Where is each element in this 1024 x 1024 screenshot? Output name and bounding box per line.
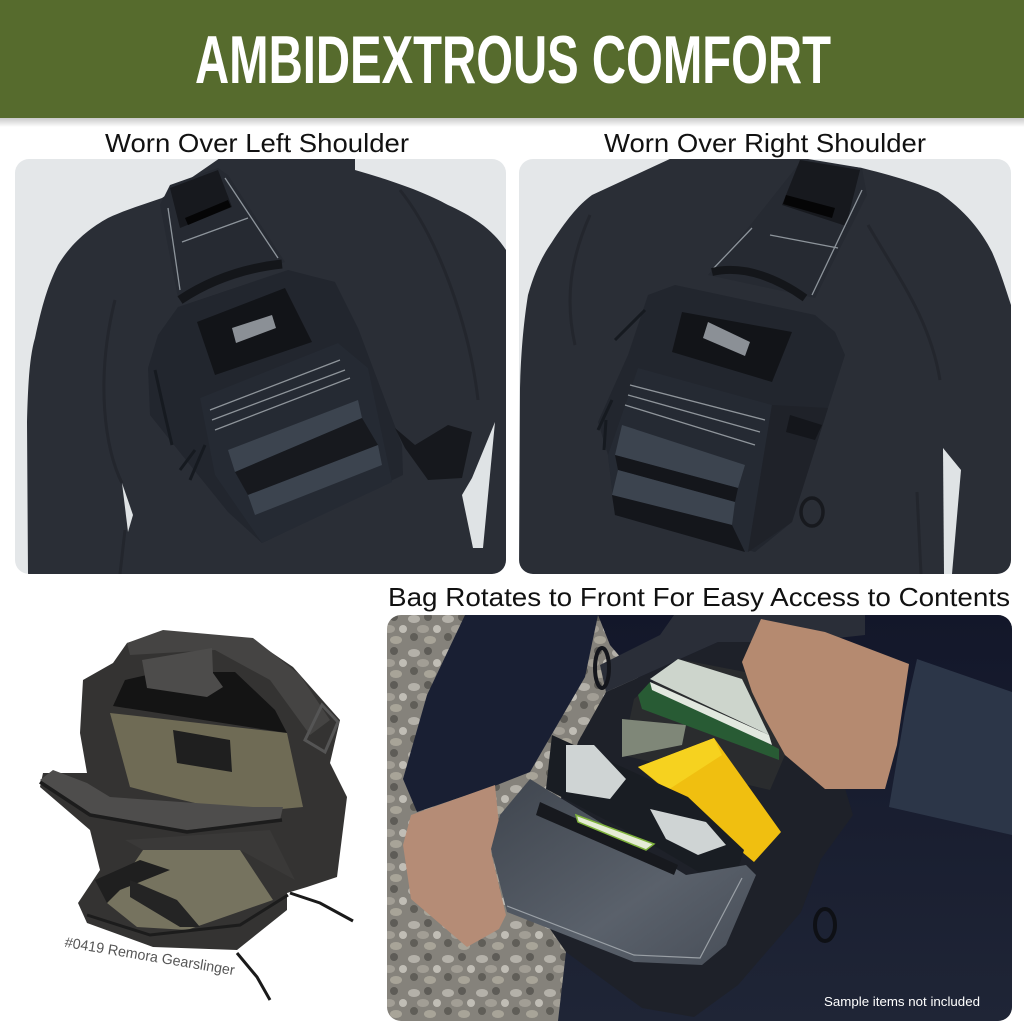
velcro tab	[142, 648, 223, 697]
header banner	[0, 0, 1024, 127]
interior tan lining	[110, 713, 303, 813]
left cords	[598, 310, 645, 450]
camouflage pouch	[546, 735, 744, 853]
right sleeve	[889, 659, 1012, 835]
inner label patch	[173, 730, 232, 772]
d-ring	[595, 648, 609, 688]
product photo: open bag	[40, 630, 353, 1000]
seams and arm shading	[104, 190, 478, 574]
interior pocket	[622, 659, 785, 790]
d-ring	[305, 705, 338, 752]
yellow block	[638, 738, 781, 862]
strap with buckle	[164, 176, 193, 197]
flap with zipper	[40, 770, 283, 830]
webbing	[228, 400, 362, 472]
heading: right shoulder: Worn Over Right Shoulder	[604, 128, 926, 158]
left arm	[403, 615, 598, 812]
caption: product name: #0419 Remora Gearslinger	[64, 935, 236, 979]
handle	[712, 270, 805, 298]
lower pocket rim zipper	[87, 895, 288, 935]
torso	[558, 615, 1012, 1021]
left hand	[403, 785, 506, 947]
side strap	[748, 550, 750, 552]
strap and handle	[127, 630, 330, 735]
handle	[180, 264, 282, 300]
side clip and strap	[395, 425, 472, 480]
panel: worn over left shoulder photo	[15, 158, 506, 574]
heading: bag rotates: Bag Rotates to Front For Easy Access to Contents	[388, 582, 1010, 612]
velcro strip	[536, 802, 678, 875]
webbing	[615, 425, 745, 488]
lower tan lining	[107, 850, 273, 930]
seams	[570, 215, 940, 574]
top strap	[600, 615, 865, 692]
bag lower body	[530, 642, 853, 1017]
panel: bag rotated to front photo	[387, 615, 1012, 1021]
velcro patch	[672, 312, 792, 382]
front pocket	[200, 343, 392, 543]
right hand	[742, 619, 909, 789]
lower d-ring	[815, 909, 835, 941]
flap stitching	[507, 878, 742, 958]
caption: sample items: Sample items not included	[824, 994, 980, 1009]
bag body	[148, 270, 403, 543]
flap	[491, 779, 756, 965]
green label	[576, 815, 654, 850]
torso	[27, 158, 506, 574]
cords	[155, 370, 205, 480]
front pocket	[608, 368, 772, 552]
heading: left shoulder: Worn Over Left Shoulder	[105, 128, 409, 158]
lower pocket upper rim	[125, 830, 295, 880]
strap with buckle	[854, 166, 862, 168]
interior dark	[113, 672, 287, 733]
torso	[519, 158, 1011, 574]
velcro patch	[197, 288, 312, 375]
panel: worn over right shoulder photo	[519, 158, 1011, 574]
d-ring	[801, 498, 823, 526]
bag body	[598, 285, 845, 552]
pull cords	[237, 893, 353, 1000]
